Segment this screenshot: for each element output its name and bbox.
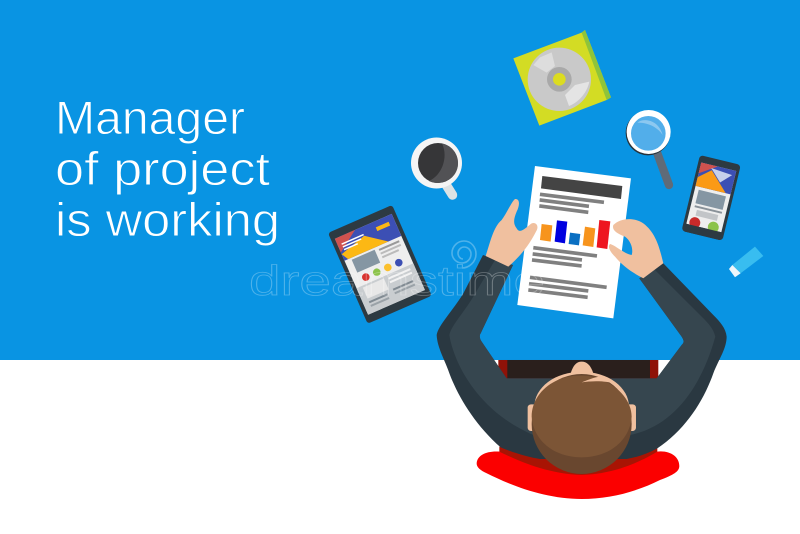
right hand: [609, 219, 663, 278]
panel: blue background: [0, 0, 800, 360]
hair highlight: [582, 377, 617, 384]
phone content: [684, 189, 730, 240]
seat: [477, 451, 679, 499]
tablet content: [345, 238, 425, 315]
jacket: [437, 255, 727, 459]
seat shadow: [499, 447, 657, 475]
title: [55, 91, 280, 246]
head: [528, 362, 636, 474]
document with bar chart: [517, 166, 631, 318]
hair shadow: [532, 374, 632, 474]
chair back: [498, 360, 658, 383]
document text lines middle: [532, 248, 597, 266]
hair: [532, 376, 632, 457]
watermark: [249, 241, 545, 304]
neck: [571, 362, 593, 373]
manager figure: [437, 199, 727, 474]
panel: white floor: [0, 360, 800, 534]
title: is working: [55, 193, 280, 246]
document text lines bottom: [528, 277, 607, 297]
icon: tablet: [328, 205, 432, 324]
chair back dark inset: [507, 360, 650, 378]
chair and seat: [477, 360, 679, 499]
tablet banner: [335, 214, 401, 261]
document text lines top: [539, 194, 604, 212]
jacket shadow side: [437, 255, 727, 459]
tablet screen: [335, 214, 425, 315]
icon: coffee cup: [411, 138, 462, 195]
document heading bar: [541, 176, 622, 199]
phone banner: [696, 163, 736, 194]
icon: magnifying glass: [626, 110, 671, 185]
watermark: dreamstime: [249, 257, 545, 304]
left hand: [486, 199, 537, 267]
title: of project: [55, 142, 270, 195]
ears: [528, 404, 636, 431]
icon: smartphone: [682, 155, 741, 241]
scalp: [534, 372, 629, 442]
title: Manager: [55, 91, 245, 144]
icon: CD case: [513, 30, 611, 126]
bar chart: [540, 220, 610, 249]
jacket light side: [449, 260, 715, 435]
icon: USB stick: [729, 247, 763, 277]
watermark spiral: [452, 241, 476, 268]
